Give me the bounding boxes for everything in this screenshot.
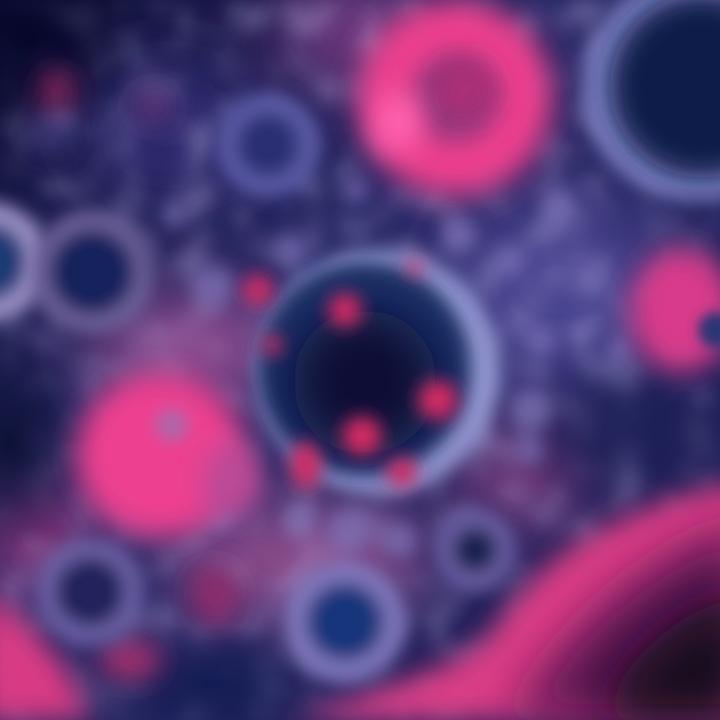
background haze xyxy=(0,0,670,610)
large pink membrane: bottom right xyxy=(290,482,720,720)
pink glow: bottom left xyxy=(0,565,239,720)
ring cell: left edge xyxy=(0,212,38,312)
dark cell: top right xyxy=(583,0,720,200)
pink cell: top centre xyxy=(363,6,547,190)
pink cell: lower left xyxy=(76,373,262,537)
small pink spots: upper left xyxy=(28,72,171,153)
spike spots on main cell xyxy=(243,260,458,489)
ring cell: bottom left xyxy=(46,548,134,636)
main dark cell with spikes xyxy=(243,250,500,494)
ring cell: lower centre right xyxy=(443,518,507,582)
pink glow: right edge xyxy=(630,248,720,372)
lavender ring: upper middle xyxy=(226,103,310,187)
ring cell: left xyxy=(40,220,144,324)
ring cell: bottom centre xyxy=(295,572,395,672)
mottled speckles xyxy=(48,108,634,558)
